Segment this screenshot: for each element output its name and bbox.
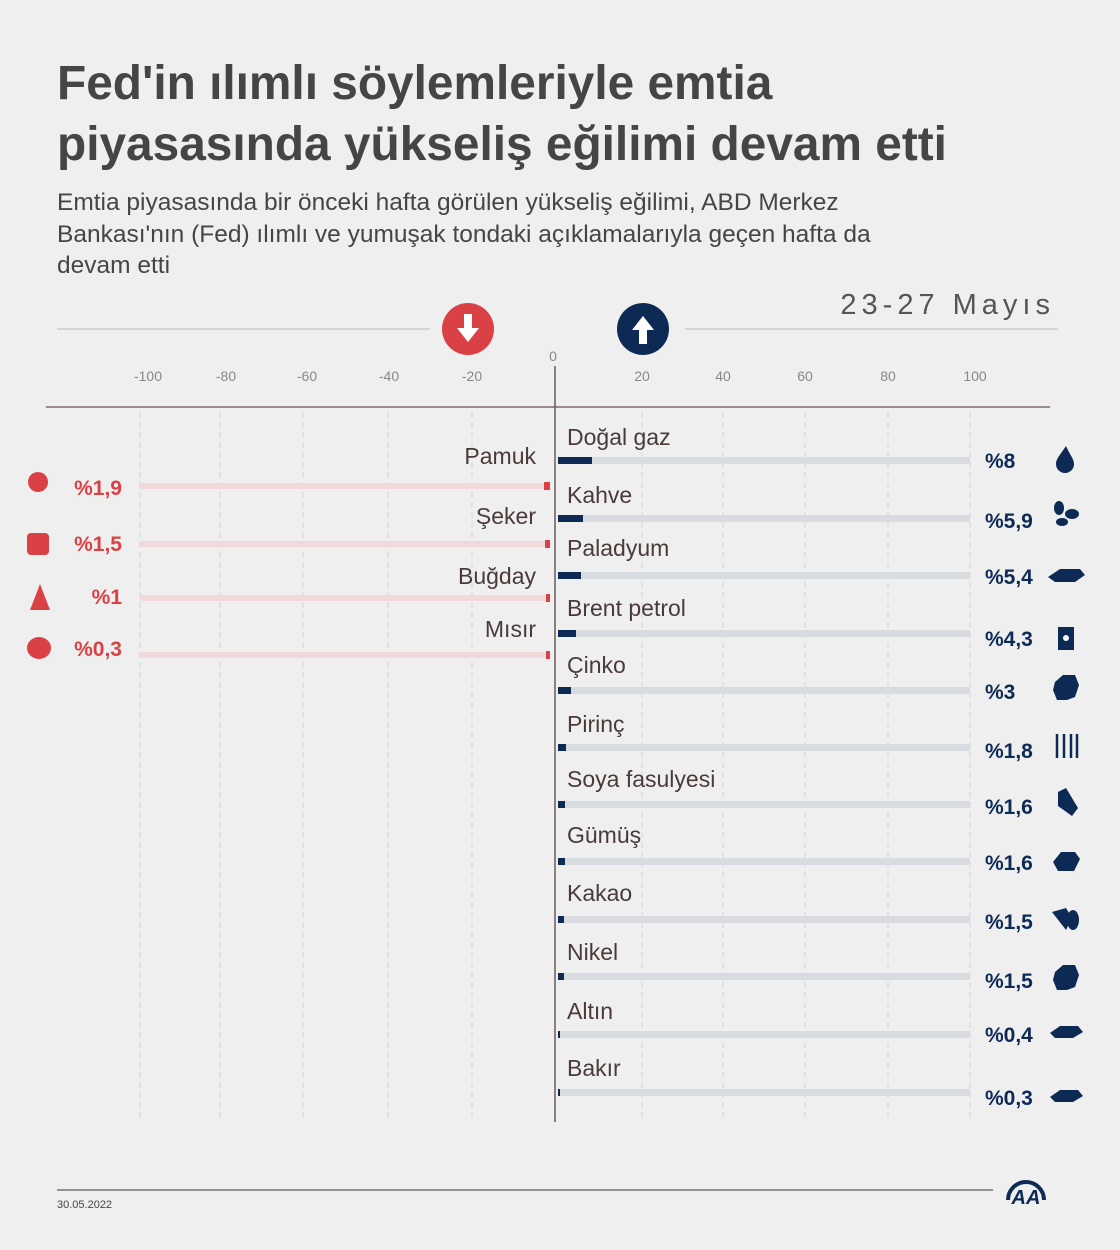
axis labels: 0 <box>549 348 557 364</box>
negative bars: Buğday <box>458 563 536 589</box>
positive bars: Bakır <box>567 1055 621 1081</box>
subtitle: Emtia piyasasında bir önceki hafta görülen yükseliş eğilimi, ABD Merkez <box>57 189 839 216</box>
title <box>57 57 947 171</box>
negative bars <box>27 443 550 661</box>
logo: AA <box>1008 1182 1044 1209</box>
negative bars: Şeker <box>476 503 536 529</box>
negative bars: %1,5 <box>74 533 122 556</box>
icon: up arrow <box>617 303 669 355</box>
axis labels <box>134 348 987 384</box>
axis labels: 60 <box>797 368 813 384</box>
negative bars: %1 <box>92 586 122 609</box>
negative bars: %0,3 <box>74 638 122 661</box>
negative bars: %1,9 <box>74 477 122 500</box>
positive bars: %3 <box>985 681 1015 704</box>
positive bars: Nikel <box>567 939 618 965</box>
title: piyasasında yükseliş eğilimi devam etti <box>57 118 947 171</box>
subtitle: devam etti <box>57 252 170 279</box>
positive bars: Doğal gaz <box>567 424 671 450</box>
positive bars: %8 <box>985 450 1016 473</box>
positive bars: %0,3 <box>985 1087 1033 1110</box>
positive bars <box>558 424 1085 1110</box>
positive bars: %5,9 <box>985 510 1033 533</box>
positive bars: %1,6 <box>985 796 1033 819</box>
footer date: 30.05.2022 <box>57 1199 112 1211</box>
axis labels: -80 <box>216 368 236 384</box>
positive bars: Çinko <box>567 652 626 678</box>
positive bars: Pirinç <box>567 711 625 737</box>
positive bars: Gümüş <box>567 822 641 848</box>
positive bars: %1,5 <box>985 970 1033 993</box>
positive bars: %5,4 <box>985 566 1033 589</box>
date range: 23-27 Mayıs <box>840 289 1055 321</box>
positive bars: %1,6 <box>985 852 1033 875</box>
logo: AA: AA <box>1011 1187 1040 1209</box>
positive bars: %0,4 <box>985 1024 1033 1047</box>
axis labels: 20 <box>634 368 650 384</box>
positive bars: %1,5 <box>985 911 1033 934</box>
axis labels: -20 <box>462 368 482 384</box>
axis labels: 40 <box>715 368 731 384</box>
positive bars: Brent petrol <box>567 595 686 621</box>
positive bars: Kakao <box>567 880 632 906</box>
positive bars: Kahve <box>567 482 632 508</box>
positive bars: %1,8 <box>985 740 1033 763</box>
positive bars: Soya fasulyesi <box>567 766 715 792</box>
axis labels: -60 <box>297 368 317 384</box>
axis labels: -100 <box>134 368 162 384</box>
positive bars: Altın <box>567 998 613 1024</box>
subtitle: Bankası'nın (Fed) ılımlı ve yumuşak tondaki açıklamalarıyla geçen hafta da <box>57 220 871 248</box>
positive bars: Paladyum <box>567 535 669 561</box>
axis labels: 100 <box>963 368 987 384</box>
negative bars: Mısır <box>485 616 536 642</box>
icon: down arrow <box>442 303 494 355</box>
title: Fed'in ılımlı söylemleriyle emtia <box>57 57 772 110</box>
axis labels: 80 <box>880 368 896 384</box>
subtitle <box>57 189 871 279</box>
axis labels: -40 <box>379 368 399 384</box>
positive bars: %4,3 <box>985 628 1033 651</box>
negative bars: Pamuk <box>464 443 536 469</box>
